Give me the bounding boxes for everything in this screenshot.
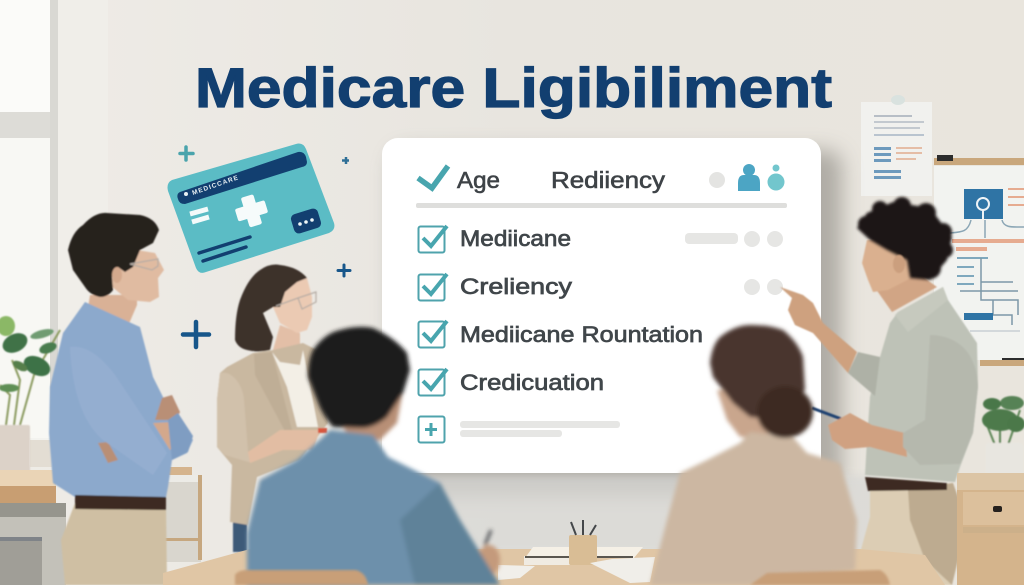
pants <box>860 483 965 585</box>
left plant <box>0 316 60 474</box>
curly hair <box>857 197 953 280</box>
person: front man <box>247 327 500 585</box>
pants shade <box>908 483 965 585</box>
window <box>0 0 58 467</box>
forearm and hand <box>828 413 907 457</box>
icon: plus blue <box>338 265 350 276</box>
bun <box>757 386 813 438</box>
neck <box>717 390 770 437</box>
hand <box>478 545 500 575</box>
blouse <box>272 350 318 427</box>
person: right man <box>780 197 978 585</box>
hair <box>235 265 307 352</box>
glasses <box>130 259 158 270</box>
lower hand <box>98 442 118 463</box>
panel: eligibility checklist <box>382 138 821 473</box>
icon: medicare card: MEDICCARE <box>191 174 240 197</box>
hair <box>710 325 805 420</box>
icon: plus small <box>342 157 349 164</box>
neck <box>273 325 300 363</box>
face <box>110 248 164 302</box>
row: Creliency <box>418 274 783 300</box>
lapel <box>254 352 292 435</box>
shirt collar <box>895 287 948 332</box>
poster: flowchart <box>934 155 1024 366</box>
forearm <box>153 422 180 450</box>
belt <box>75 495 166 510</box>
blazer <box>650 432 857 585</box>
person: front woman <box>650 325 857 585</box>
notebooks <box>524 547 643 565</box>
sleeve <box>217 373 252 463</box>
wall shade below panel <box>400 475 880 555</box>
paper <box>590 557 655 583</box>
row: placeholder <box>418 416 620 442</box>
rolled sleeve <box>903 335 978 465</box>
row: Mediicane <box>418 226 783 252</box>
pen <box>485 530 491 545</box>
icon: person teal <box>768 164 784 190</box>
hair <box>308 327 410 428</box>
row: Mediicane: Mediicane <box>460 226 571 251</box>
side shelf <box>165 467 202 562</box>
neck <box>88 295 137 326</box>
row: Medicane Rountation: Mediicane Rountation <box>460 322 703 347</box>
face <box>862 240 913 292</box>
pointing arm <box>780 287 857 373</box>
ear <box>893 255 905 273</box>
left desk and radiator <box>0 470 66 585</box>
marker <box>318 428 327 433</box>
sleeve short <box>848 352 880 396</box>
icon: plus large <box>183 322 209 347</box>
held pen <box>812 408 844 420</box>
person: woman in blazer <box>217 265 328 552</box>
face <box>273 278 312 333</box>
icon: plus teal <box>180 147 193 160</box>
shirt <box>49 302 193 497</box>
icon: person blue <box>738 164 760 191</box>
pants <box>61 503 167 585</box>
title: Medicare Ligibiliment <box>195 56 832 119</box>
glasses <box>276 292 316 309</box>
left chair <box>235 570 368 585</box>
row: Creliency: Creliency <box>460 274 572 299</box>
ear <box>112 267 122 283</box>
poster: document <box>861 95 932 196</box>
person: left man <box>49 213 193 585</box>
forearm and hand <box>248 430 320 463</box>
cuff <box>168 413 193 460</box>
hair <box>68 213 159 297</box>
panel shadow <box>392 150 842 495</box>
icon: header check <box>418 166 448 188</box>
pants <box>233 520 247 552</box>
right plant <box>982 396 1024 477</box>
upper hand <box>155 395 180 420</box>
notebook left <box>498 565 535 580</box>
header row: Rediiency <box>551 167 666 193</box>
icon: medicare card <box>168 144 334 273</box>
wall recess <box>58 0 108 470</box>
cabinet <box>957 473 1024 585</box>
shirt <box>247 430 500 585</box>
pencil cup <box>569 520 597 565</box>
neck <box>873 270 937 312</box>
blazer <box>217 343 328 525</box>
header row: Age <box>457 167 500 193</box>
row: Credicuation: Credicuation <box>460 370 604 395</box>
skin <box>340 390 403 440</box>
right plant pot <box>986 443 1023 477</box>
right chair <box>750 570 890 585</box>
belt <box>865 477 947 491</box>
row: Credicuation <box>418 369 604 396</box>
plant pot <box>0 425 30 474</box>
sleeve <box>70 347 167 475</box>
header row <box>418 164 784 193</box>
arm shade <box>400 483 500 585</box>
table <box>163 520 945 585</box>
shirt <box>865 287 978 482</box>
